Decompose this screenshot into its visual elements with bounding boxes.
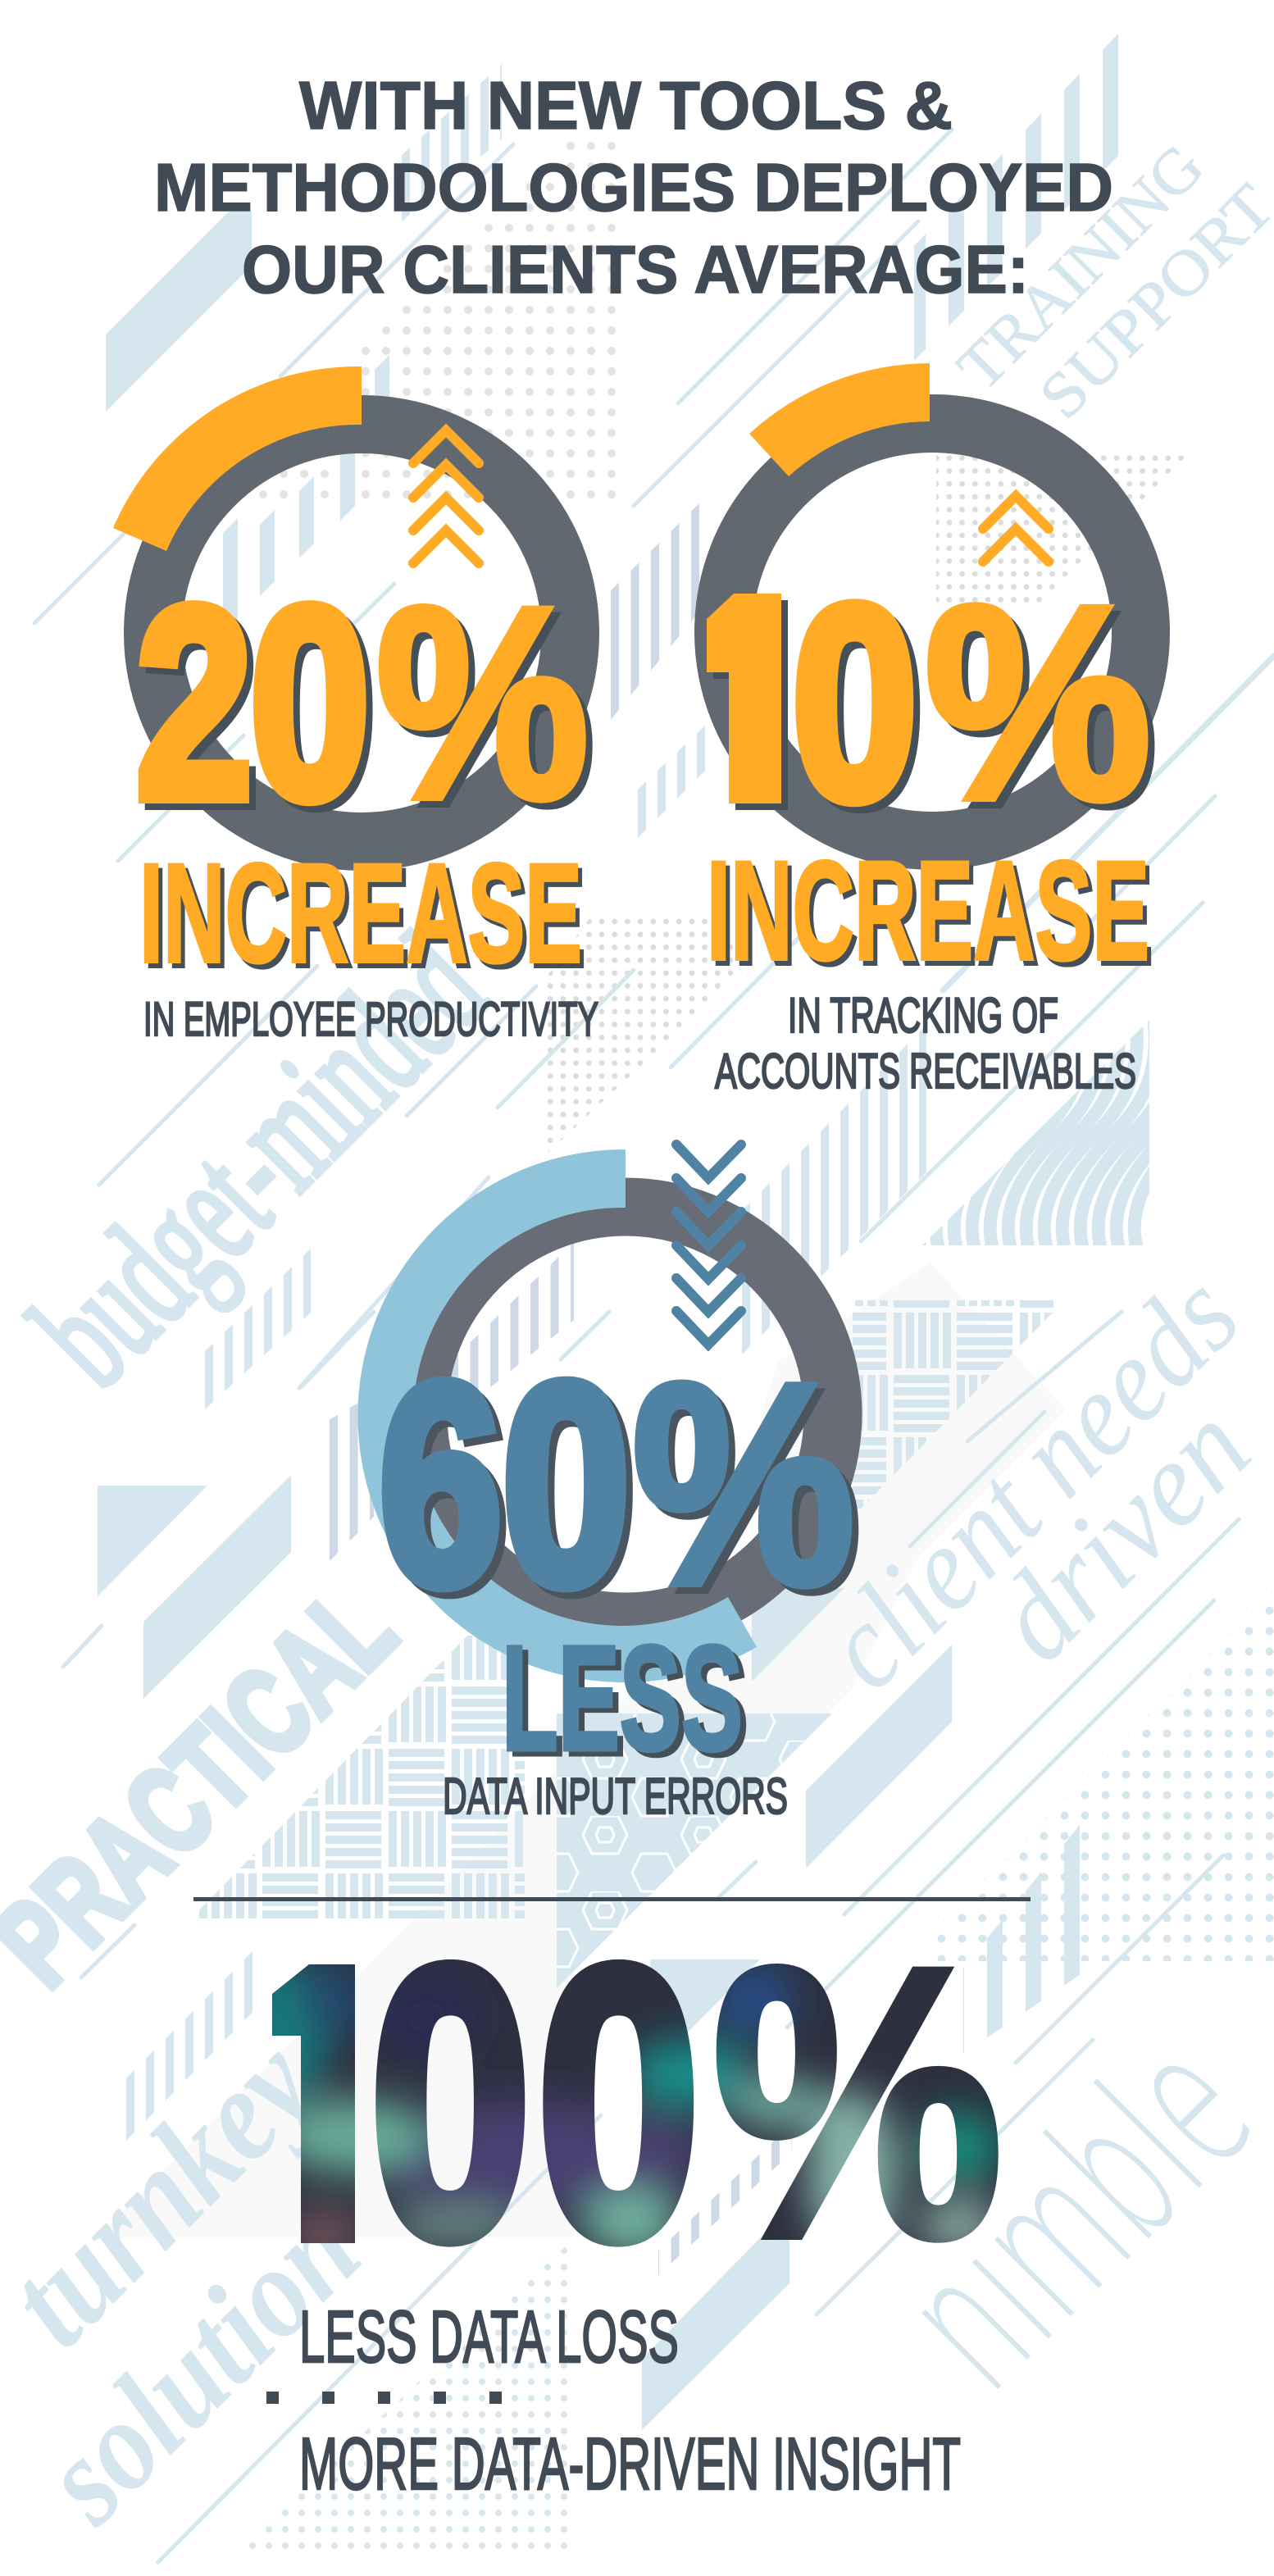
wave stripes bbox=[922, 1020, 1149, 1245]
number: 100% with aurora fill: 1 bbox=[238, 1887, 402, 2318]
number: 10%: 0 bbox=[799, 556, 924, 863]
number: 10%: 1 bbox=[680, 548, 853, 856]
number: 60%: % bbox=[632, 1324, 855, 1645]
caption: IN TRACKING OF bbox=[788, 988, 1058, 1043]
number: 60% bbox=[379, 1324, 862, 1651]
caption: less data loss: LESS DATA LOSS bbox=[299, 2296, 679, 2378]
number: 100% with aurora fill bbox=[272, 1959, 999, 2247]
word: less bbox=[502, 1614, 748, 1786]
number: 20%: 2 bbox=[136, 551, 253, 855]
dot field mid centre bbox=[544, 912, 742, 1156]
caption: DATA INPUT ERRORS bbox=[443, 1768, 788, 1825]
dot field lower right bbox=[926, 1591, 1274, 1961]
icon: up chevrons bbox=[413, 430, 479, 563]
title bbox=[154, 67, 1113, 307]
word: training: TRAINING bbox=[944, 130, 1217, 403]
number: 20%: % bbox=[376, 551, 589, 855]
word: increase bbox=[139, 835, 586, 997]
hexagon block bbox=[557, 1714, 832, 1988]
faint grey backdrop shape bbox=[98, 1263, 1066, 2237]
divider bbox=[193, 1897, 1031, 1901]
word: increase: INCREASE bbox=[139, 835, 582, 992]
icon: down chevrons bbox=[676, 1145, 741, 1345]
title: OUR CLIENTS AVERAGE: bbox=[242, 231, 1029, 307]
ring: grey track bbox=[152, 425, 571, 841]
dot field upper right bbox=[936, 449, 1193, 605]
ring: orange arc bbox=[749, 363, 930, 476]
number: 100% with aurora fill: 0 bbox=[537, 1887, 700, 2318]
number: 20%: 2 bbox=[143, 558, 259, 862]
word: support: SUPPORT bbox=[1026, 170, 1274, 432]
number: 20%: % bbox=[383, 558, 595, 862]
dotted separator bbox=[266, 2392, 502, 2404]
number: 20%: 0 bbox=[257, 558, 376, 862]
number: 100% with aurora fill: % bbox=[712, 1887, 1003, 2318]
digit 1 shadow bbox=[713, 600, 788, 810]
word: less: LESS bbox=[507, 1619, 748, 1786]
number: 60%: 6 bbox=[385, 1331, 509, 1651]
vertical bar bands bbox=[914, 34, 1118, 361]
digit 1 face bbox=[707, 594, 781, 803]
dot field upper centre bbox=[250, 139, 619, 504]
ring: grey track bbox=[723, 423, 1141, 841]
number: 10%: 0 bbox=[792, 549, 917, 857]
number: 60%: 0 bbox=[508, 1331, 637, 1651]
number: 20%: 0 bbox=[250, 551, 370, 855]
dot field bottom bbox=[246, 2245, 567, 2551]
caption: IN EMPLOYEE PRODUCTIVITY bbox=[143, 993, 598, 1046]
basket weave blocks bbox=[853, 1300, 1053, 1509]
number: 100% with aurora fill: 0 bbox=[370, 1887, 531, 2318]
word: increase: INCREASE bbox=[143, 840, 586, 997]
ring: grey track bbox=[418, 1207, 833, 1622]
ring: orange arc bbox=[113, 366, 362, 551]
number: 60%: % bbox=[639, 1331, 862, 1651]
panel: 10 percent increase bbox=[680, 363, 1158, 1099]
word: less: LESS bbox=[502, 1614, 743, 1782]
number: 10% bbox=[707, 594, 1154, 813]
ring: light blue arc bbox=[357, 1149, 757, 1682]
number: 60%: 6 bbox=[379, 1324, 503, 1645]
caption bbox=[715, 988, 1136, 1099]
number: 60%: 0 bbox=[502, 1324, 630, 1645]
word: budget-minded: budget-minded bbox=[2, 903, 516, 1418]
title: WITH NEW TOOLS & bbox=[299, 67, 953, 143]
number: 20% bbox=[136, 551, 595, 862]
word: solution: solution bbox=[13, 2177, 387, 2550]
icon: up chevrons bbox=[983, 496, 1049, 562]
panel: 20 percent increase bbox=[113, 366, 598, 1046]
digit 1 body bbox=[272, 1964, 355, 2243]
panel: 60 percent less bbox=[357, 1145, 862, 1825]
number: 10%: % bbox=[925, 549, 1151, 857]
panel: 100 percent bbox=[266, 1959, 999, 2491]
title: METHODOLOGIES DEPLOYED bbox=[154, 149, 1113, 225]
number: 10%: % bbox=[931, 556, 1158, 863]
large pale parallelograms bbox=[98, 211, 952, 2430]
